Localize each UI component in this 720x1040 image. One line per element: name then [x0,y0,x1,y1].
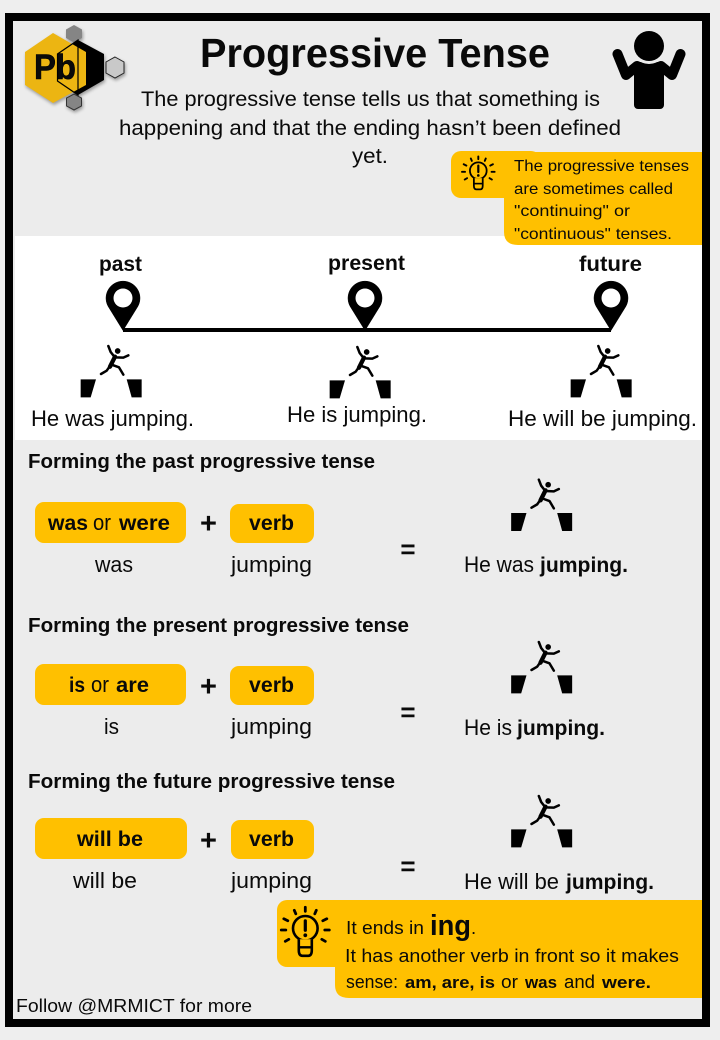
intro text [119,88,621,168]
icon: jumper [511,480,572,531]
logo [25,25,124,110]
timeline panel background [15,236,702,440]
equals: = [400,534,416,564]
result sentence: He will be [464,869,559,894]
past marker: He was jumping. [31,406,194,431]
section: present progressive: jumping [230,714,312,739]
pill: was or were [35,502,186,543]
example parts: was [94,552,133,577]
timeline [31,252,697,431]
pill: was or were: or [93,510,111,535]
callout: alternative names: "continuous" tenses. [514,226,672,243]
callout: how to recognise: were. [601,973,651,992]
pill: is or are: is [69,674,85,697]
icon: light bulb [281,907,329,956]
callout: how to recognise: It has another verb in front so it makes [345,945,679,966]
result sentence: He was [464,552,534,577]
example parts: is [104,714,119,739]
callout: alternative names: are sometimes called [514,181,673,198]
section: past progressive: jumping [230,552,312,577]
callout: how to recognise: or [501,971,518,992]
present marker: present [328,252,405,275]
pill: verb: verb [249,674,294,697]
result sentence [464,552,628,577]
icon: light bulb [462,156,495,189]
result sentence: jumping. [516,717,605,740]
example parts: will be [72,868,137,893]
past marker [31,253,194,431]
heading: Forming the present progressive tense [28,614,409,637]
pill: verb: verb [249,828,294,851]
equals: = [400,697,416,727]
pill: verb [231,820,314,859]
callout: alternative names [451,151,702,245]
logo: Pb [34,48,76,87]
callout: alternative names: The progressive tenses [514,158,689,175]
title: Progressive Tense [200,30,550,76]
callout: alternative names: "continuing" or [514,203,631,220]
callout: how to recognise: and [564,971,595,992]
equals: = [400,851,416,881]
plus: + [200,671,217,703]
future marker: future [579,253,642,276]
pill: is or are [35,664,186,705]
pill: was or were: was [47,512,88,535]
result sentence [464,869,654,894]
result sentence [464,715,605,740]
intro text: The progressive tense tells us that something is [141,88,600,111]
footer credit: Follow @MRMICT for more [16,996,252,1016]
future marker [508,253,697,431]
pill: verb: verb [249,512,294,535]
plus: + [200,508,217,540]
section: future progressive [28,770,654,894]
callout: how to recognise [277,900,702,998]
result sentence: jumping. [539,554,628,577]
pill: will be [35,818,187,859]
callout: how to recognise: am, are, is [405,973,495,992]
section: past progressive [28,450,628,577]
callout: how to recognise: sense: [346,971,398,992]
pill: was or were: were [118,512,170,535]
callout: how to recognise: . [471,917,476,938]
callout: how to recognise: was [524,973,557,992]
section: present progressive [28,614,605,740]
plus: + [200,825,217,857]
pill: verb [230,666,314,705]
callout: how to recognise: ing [430,910,471,942]
future marker: He will be jumping. [508,406,697,431]
heading: Forming the future progressive tense [28,770,395,793]
callout: how to recognise: It ends in [346,917,424,938]
icon: jumper [511,642,572,693]
intro text: yet. [352,145,388,168]
present marker [287,252,427,427]
section: future progressive: jumping [230,868,312,893]
pill: is or are: or [91,672,109,697]
result sentence: He is [464,715,512,740]
pill: will be: will be [76,828,143,851]
result sentence: jumping. [565,871,654,894]
past marker: past [99,253,142,276]
present marker: He is jumping. [287,402,427,427]
pill: verb [230,504,314,543]
pill: is or are: are [116,674,149,697]
intro text: happening and that the ending hasn’t been defined [119,117,621,140]
icon: shrugging person [618,28,680,109]
heading: Forming the past progressive tense [28,450,375,473]
icon: jumper [511,796,572,847]
